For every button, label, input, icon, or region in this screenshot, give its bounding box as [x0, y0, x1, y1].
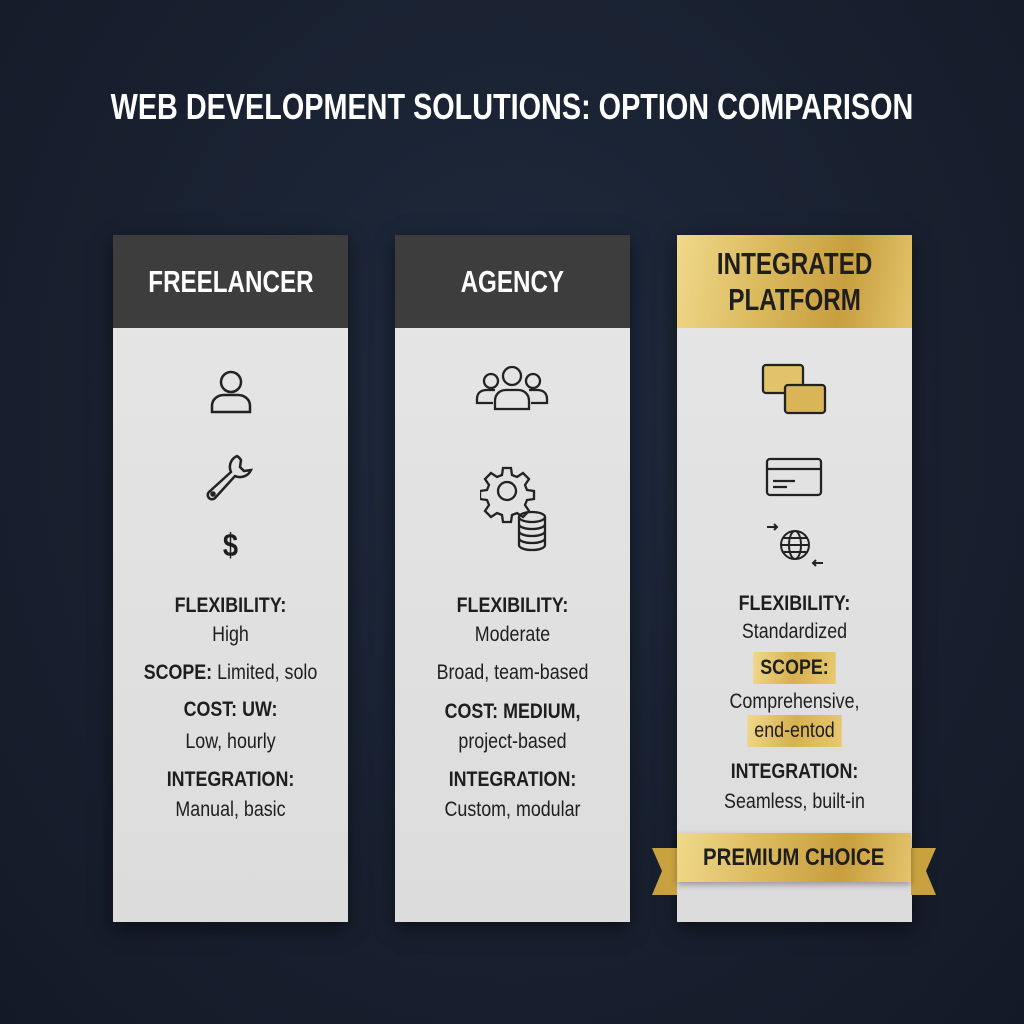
text: flexibility: FLEXIBILITY:	[175, 594, 286, 617]
icon: gear and database	[480, 466, 546, 552]
text: scope highlight: SCOPE:	[760, 656, 829, 679]
panel: integrated platform: Seamless, built-in	[724, 790, 865, 813]
ribbon text: PREMIUM CHOICE	[703, 844, 885, 870]
text: cost: COST: UW:	[184, 698, 277, 721]
panel: integrated platform: Standardized	[742, 620, 847, 643]
text: flexibility: FLEXIBILITY:	[739, 592, 850, 615]
icon: team	[476, 366, 548, 410]
panel: freelancer: High	[212, 623, 249, 646]
ribbon: premium choice	[652, 832, 936, 895]
header: freelancer: FREELANCER	[148, 264, 313, 298]
icon: wrench	[206, 454, 253, 500]
header: integrated platform: PLATFORM	[728, 282, 861, 316]
text: cost: COST: MEDIUM,	[445, 700, 580, 723]
text: flexibility: FLEXIBILITY:	[457, 594, 568, 617]
panel: integrated platform: Comprehensive,	[730, 690, 859, 713]
header: integrated platform: INTEGRATED	[717, 246, 872, 280]
text: scope: Broad, team-based	[437, 661, 588, 684]
header: agency: AGENCY	[461, 264, 564, 298]
panel: agency: Moderate	[475, 623, 550, 646]
panel: agency: project-based	[458, 730, 567, 753]
panel: freelancer: Manual, basic	[175, 798, 286, 821]
icon: dollar: $	[223, 527, 238, 563]
text: integration: INTEGRATION:	[731, 760, 858, 783]
panel: integrated platform	[677, 235, 912, 922]
panel: freelancer: Low, hourly	[185, 730, 276, 753]
text: integration: INTEGRATION:	[449, 768, 576, 791]
title: WEB DEVELOPMENT SOLUTIONS: OPTION COMPARISON	[111, 86, 913, 127]
panel: agency	[395, 235, 630, 922]
text: end-to-end highlight: end-entod	[754, 719, 835, 742]
text: scope: SCOPE: Limited, solo	[144, 661, 317, 684]
header: freelancer	[113, 235, 348, 328]
icon: stacked windows	[762, 364, 826, 414]
text: integration: INTEGRATION:	[167, 768, 294, 791]
icon: globe with arrows	[767, 523, 823, 567]
panel: freelancer	[113, 235, 348, 922]
icon: person	[210, 370, 252, 414]
ribbon text	[677, 833, 911, 882]
panel: agency: Custom, modular	[445, 798, 580, 821]
icon: card	[766, 458, 822, 496]
header: integrated platform	[677, 235, 912, 328]
header: agency	[395, 235, 630, 328]
